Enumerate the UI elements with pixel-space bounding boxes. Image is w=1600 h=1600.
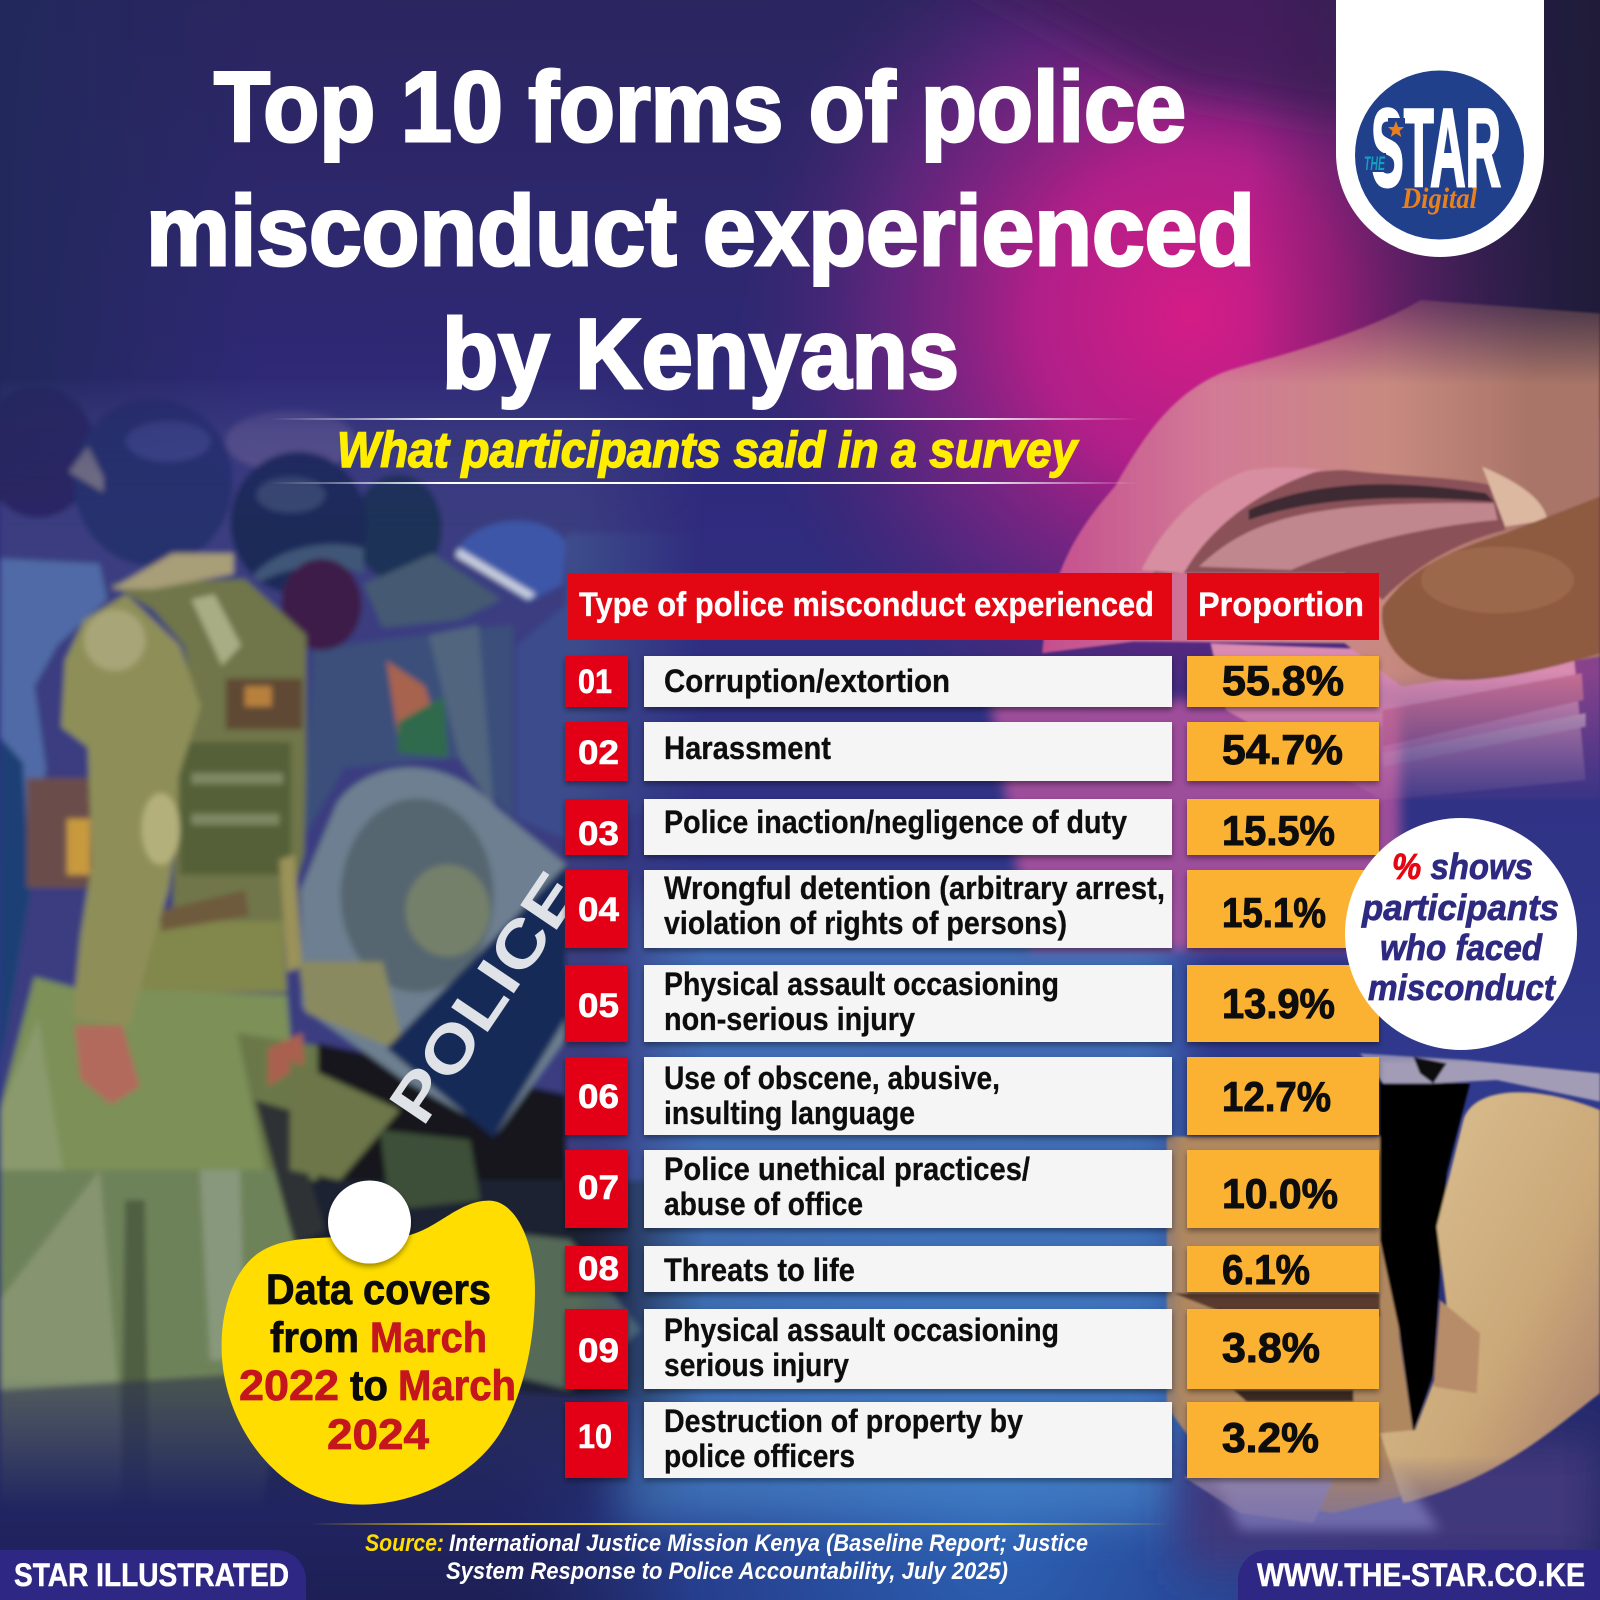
row 03: 03 bbox=[578, 815, 619, 853]
callout: data period blob: 2022 bbox=[239, 1362, 339, 1410]
row 03 bbox=[565, 799, 1379, 855]
row 04: violation of rights of persons) bbox=[664, 905, 1067, 941]
row 03: Police inaction/negligence of duty bbox=[664, 804, 1127, 840]
row 04: Wrongful detention (arbitrary arrest, bbox=[664, 870, 1165, 906]
source note: System Response to Police Accountability, July 2025) bbox=[446, 1558, 1008, 1585]
row 02: Harassment bbox=[664, 730, 831, 766]
logo: The Star Digital: Digital bbox=[1401, 182, 1478, 215]
table header: Proportion bbox=[1198, 586, 1364, 624]
footer tab: website bbox=[1238, 1550, 1600, 1600]
footer tab: star illustrated: STAR ILLUSTRATED bbox=[14, 1557, 289, 1593]
row 06: 12.7% bbox=[1222, 1073, 1331, 1120]
row 02: 02 bbox=[578, 734, 619, 772]
row 10: police officers bbox=[664, 1438, 855, 1474]
row 09: serious injury bbox=[664, 1347, 849, 1383]
callout: data period blob: March bbox=[398, 1362, 516, 1410]
table header bbox=[568, 573, 1379, 640]
row 05: 13.9% bbox=[1222, 980, 1335, 1027]
row 05: Physical assault occasioning bbox=[664, 966, 1059, 1002]
row 09: 3.8% bbox=[1222, 1324, 1320, 1371]
row 02: 54.7% bbox=[1222, 726, 1343, 773]
row 01: 55.8% bbox=[1222, 657, 1344, 704]
title: by Kenyans bbox=[442, 298, 959, 409]
row 01: Corruption/extortion bbox=[664, 663, 950, 699]
row 10: 3.2% bbox=[1222, 1414, 1319, 1461]
subtitle with rules: What participants said in a survey bbox=[337, 422, 1079, 478]
callout: % explanation: misconduct bbox=[1368, 967, 1557, 1008]
row 08: 6.1% bbox=[1222, 1246, 1310, 1293]
row 02 bbox=[565, 722, 1379, 781]
row 01: 01 bbox=[578, 663, 612, 701]
row 10 bbox=[565, 1402, 1379, 1478]
callout: data period blob: March bbox=[370, 1314, 487, 1362]
title bbox=[146, 51, 1255, 409]
callout: % explanation bbox=[1345, 818, 1577, 1050]
row 04 bbox=[565, 870, 1379, 948]
callout: data period blob: to bbox=[350, 1362, 388, 1410]
row 08 bbox=[565, 1246, 1379, 1293]
row 06: insulting language bbox=[664, 1095, 915, 1131]
callout: data period blob bbox=[222, 1180, 535, 1505]
callout: % explanation: who faced bbox=[1380, 927, 1543, 968]
row 10: 10 bbox=[578, 1418, 612, 1456]
logo: The Star Digital bbox=[1355, 70, 1524, 240]
row 09 bbox=[565, 1309, 1379, 1389]
footer tab: star illustrated bbox=[0, 1550, 306, 1600]
title: Top 10 forms of police bbox=[214, 51, 1186, 162]
row 01 bbox=[565, 656, 1379, 707]
row 07: 07 bbox=[578, 1169, 619, 1207]
row 06 bbox=[565, 1057, 1379, 1135]
row 08: Threats to life bbox=[664, 1252, 855, 1288]
row 07 bbox=[565, 1150, 1379, 1228]
row 07: Police unethical practices/ bbox=[664, 1151, 1030, 1187]
row 05 bbox=[565, 965, 1379, 1042]
row 07: abuse of office bbox=[664, 1186, 863, 1222]
row 10: Destruction of property by bbox=[664, 1403, 1023, 1439]
callout: % explanation: participants bbox=[1361, 887, 1559, 928]
row 08: 08 bbox=[578, 1250, 619, 1288]
row 06: 06 bbox=[578, 1078, 619, 1116]
source note: Source: bbox=[365, 1530, 444, 1557]
source note: International Justice Mission Kenya (Baseline Report; Justice bbox=[449, 1530, 1088, 1557]
photo: riot police officers seen from behind bbox=[0, 397, 696, 1493]
callout: data period blob: from bbox=[270, 1314, 359, 1362]
callout: % explanation: % shows bbox=[1392, 846, 1533, 887]
callout: data period blob: 2024 bbox=[327, 1411, 429, 1459]
row 05: 05 bbox=[578, 987, 619, 1025]
source note bbox=[310, 1523, 1170, 1585]
logo tab bbox=[1336, 0, 1544, 257]
callout: data period blob: Data covers bbox=[266, 1266, 491, 1314]
row 07: 10.0% bbox=[1222, 1170, 1338, 1217]
row 06: Use of obscene, abusive, bbox=[664, 1060, 1000, 1096]
table header: Type of police misconduct experienced bbox=[579, 586, 1154, 624]
logo: The Star Digital: THE bbox=[1364, 154, 1386, 175]
row 04: 04 bbox=[578, 891, 619, 929]
row 05: non-serious injury bbox=[664, 1001, 915, 1037]
row 09: 09 bbox=[578, 1332, 619, 1370]
row 09: Physical assault occasioning bbox=[664, 1312, 1059, 1348]
photo: hand holding banknotes bbox=[1042, 300, 1600, 800]
row 04: 15.1% bbox=[1222, 889, 1326, 936]
row 03: 15.5% bbox=[1222, 807, 1335, 854]
photo: handcuffed hands bbox=[1167, 1053, 1600, 1523]
text on riot shield: POLICE bbox=[375, 859, 594, 1136]
title: misconduct experienced bbox=[146, 175, 1255, 286]
